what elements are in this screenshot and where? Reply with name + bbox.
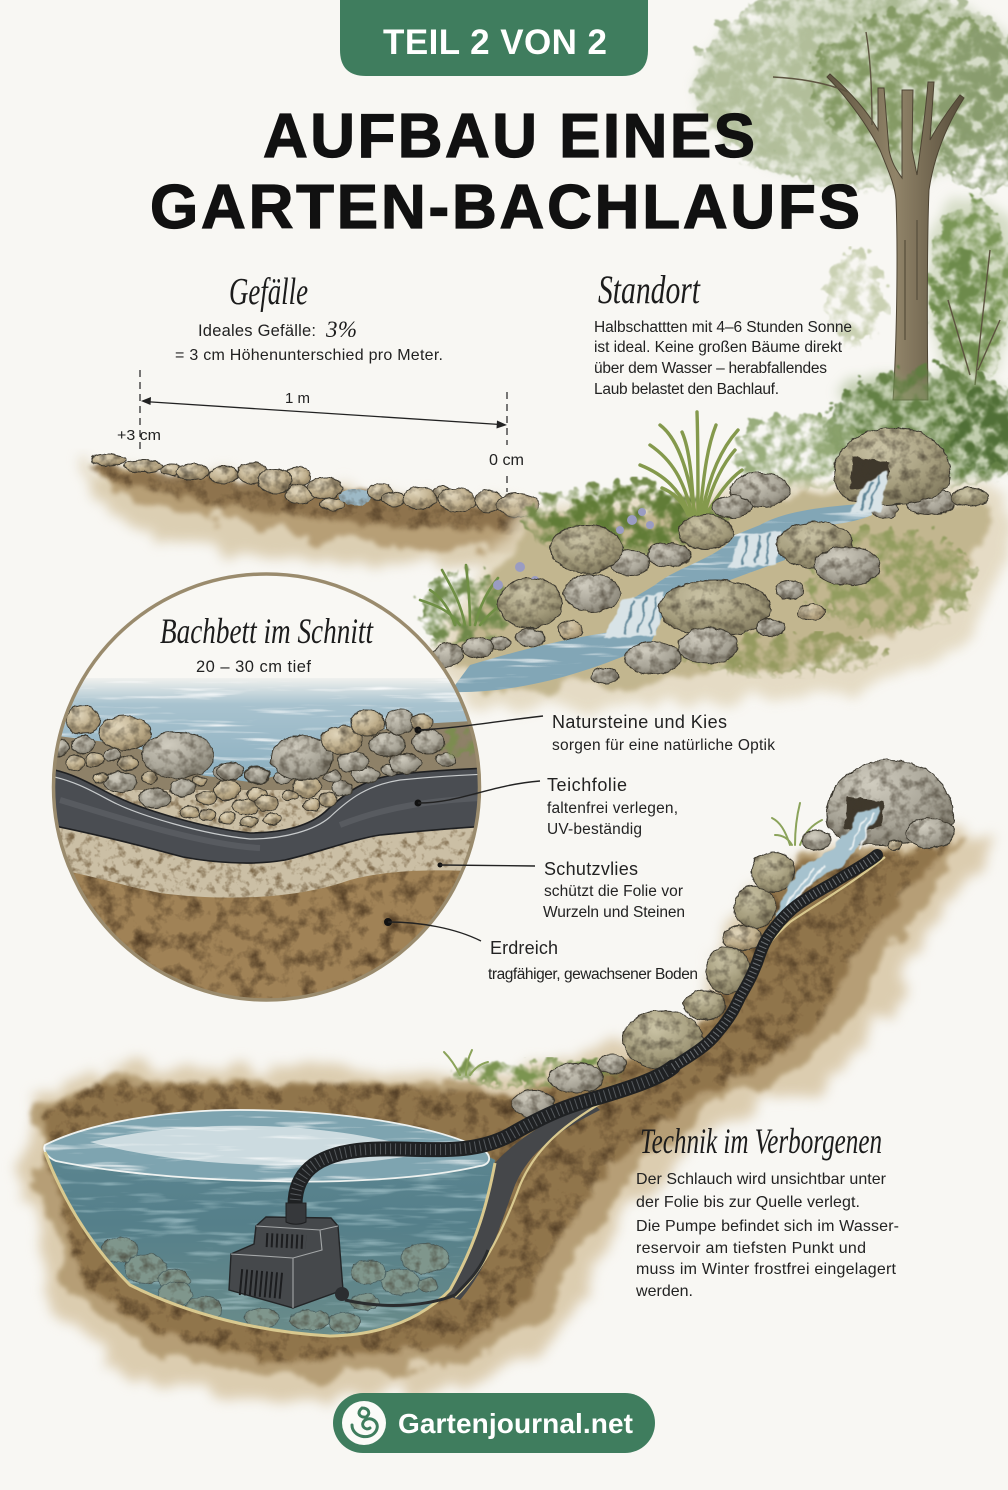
plant: small grass — [420, 565, 505, 625]
pond water — [45, 1110, 495, 1336]
slope rocks — [512, 852, 795, 1118]
text block: Standort: Laub belastet den Bachlauf. — [594, 381, 779, 398]
callout: Natursteine und Kies: Natursteine und Kies — [552, 712, 727, 732]
callout: Schutzvlies: schützt die Folie vor — [544, 883, 683, 900]
water surface — [44, 1110, 489, 1182]
diagram: slope measure: +3 cm — [117, 427, 161, 444]
text block: Technik im Verborgenen: werden. — [635, 1283, 693, 1300]
source rock — [834, 428, 950, 505]
banner: part label: TEIL 2 VON 2 — [383, 23, 607, 62]
text block: Standort: Halbschattten mit 4–6 Stunden Sonne — [594, 319, 852, 336]
callout: Teichfolie — [414, 775, 678, 838]
footer badge: Gartenjournal.net: Gartenjournal.net — [398, 1408, 633, 1439]
soil wash — [22, 830, 990, 1405]
callout: Schutzvlies: Wurzeln und Steinen — [543, 904, 685, 921]
waterfalls — [604, 530, 782, 638]
text block: Technik im Verborgenen — [635, 1121, 899, 1300]
text block: Technik im Verborgenen: Der Schlauch wird unsichtbar unter — [636, 1171, 887, 1188]
pump — [229, 1203, 349, 1308]
heading: cross-section: 20 – 30 cm tief — [196, 658, 311, 676]
illustration: stream with rocks and plants — [417, 412, 1008, 705]
banner: part label — [340, 0, 648, 76]
panel: stream bed cross-section circle — [40, 574, 500, 1020]
callout: Natursteine und Kies: sorgen für eine natürliche Optik — [552, 737, 775, 754]
title — [150, 102, 860, 242]
pond liner layer — [50, 768, 490, 863]
rocks — [433, 473, 988, 684]
illustration: pond with pump and hose — [22, 760, 990, 1405]
text block: Standort — [594, 267, 852, 398]
source waterfall — [848, 470, 888, 514]
footer badge: Gartenjournal.net — [333, 1393, 655, 1453]
callout: Erdreich — [384, 918, 698, 983]
heading: cross-section: Bachbett im Schnitt — [160, 611, 374, 651]
callout: Natursteine und Kies — [414, 712, 775, 754]
text block: Gefälle — [175, 271, 443, 364]
protective fleece layer — [50, 790, 490, 898]
water — [450, 503, 872, 692]
callout: Erdreich: Erdreich — [490, 938, 558, 958]
icon: logo — [342, 1401, 386, 1445]
text block: Technik im Verborgenen: muss im Winter frostfrei eingelagert — [636, 1261, 897, 1278]
text block: Standort: Standort — [598, 267, 701, 312]
circle border — [54, 574, 480, 1000]
text block: Technik im Verborgenen: reservoir am tiefsten Punkt und — [636, 1240, 866, 1257]
dark liner strip — [445, 1100, 600, 1300]
soil layer — [73, 870, 460, 998]
tree trunk and branches — [827, 74, 964, 400]
text block: Technik im Verborgenen: der Folie bis zur Quelle verlegt. — [636, 1194, 860, 1211]
water layer — [61, 678, 468, 782]
text block: Gefälle: Gefälle — [229, 271, 308, 313]
illustration: slope ground with stones — [85, 454, 539, 565]
diagram: slope measure: 0 cm — [489, 452, 524, 469]
flowers — [493, 508, 654, 590]
hose — [295, 855, 877, 1205]
diagram: slope measure — [117, 370, 524, 492]
callout: Teichfolie: faltenfrei verlegen, — [547, 800, 678, 817]
title: AUFBAU EINES — [263, 102, 755, 171]
plant: tall grass — [640, 412, 742, 515]
text block: Technik im Verborgenen: Die Pumpe befindet sich im Wasser- — [636, 1218, 899, 1235]
source rock lower — [803, 760, 954, 850]
callout: Teichfolie: UV-beständig — [547, 821, 642, 838]
plants on the bank — [455, 1060, 625, 1088]
illustration: tree and foliage — [695, 0, 1008, 495]
gravel base — [56, 721, 477, 790]
liner edge — [45, 1152, 495, 1336]
small waterfall — [775, 808, 880, 920]
callout: Schutzvlies: Schutzvlies — [544, 859, 638, 879]
text block: Standort: ist ideal. Keine großen Bäume direkt — [594, 339, 843, 356]
diagram: slope measure: 1 m — [285, 390, 310, 407]
pond bottom stones — [102, 1237, 449, 1332]
text block: Standort: über dem Wasser – herabfallendes — [594, 360, 827, 377]
callout: Schutzvlies — [438, 859, 685, 921]
text block: Gefälle: 3 % — [325, 317, 357, 342]
text block: Technik im Verborgenen: Technik im Verborgenen — [640, 1121, 882, 1161]
stones and gravel — [51, 706, 455, 827]
heading: cross-section — [160, 611, 374, 676]
callout: Erdreich: tragfähiger, gewachsener Boden — [488, 966, 698, 983]
text block: Gefälle: Ideales Gefälle: — [198, 322, 316, 340]
title: GARTEN-BACHLAUFS — [150, 173, 860, 242]
text block: Gefälle: = 3 cm Höhenunterschied pro Meter. — [175, 347, 443, 364]
callout: Teichfolie: Teichfolie — [547, 775, 627, 795]
